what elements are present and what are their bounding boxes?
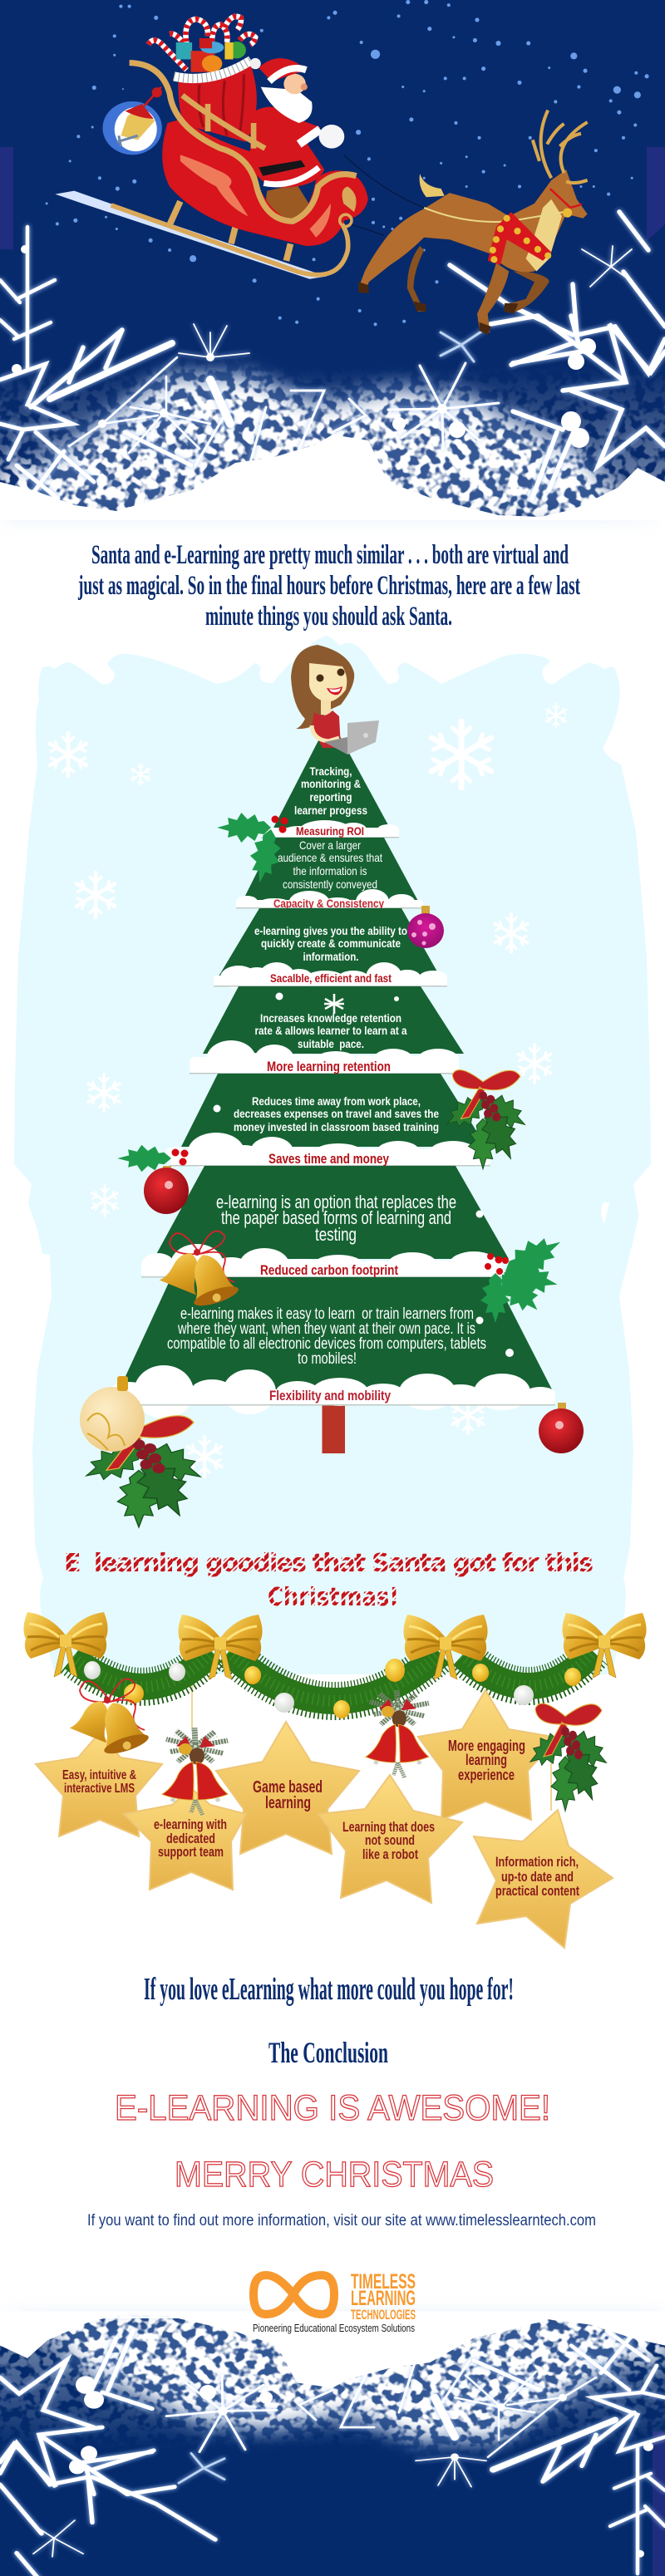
tier 6: carbon footprint: testing bbox=[315, 1224, 357, 1245]
intro text bbox=[77, 540, 580, 632]
tier 3: scalable: information. bbox=[303, 951, 359, 963]
tier 7: flexibility: e-learning makes it easy to learn or train learners from bbox=[180, 1305, 474, 1323]
tier 5: time and money bbox=[165, 1074, 490, 1171]
tree trunk bbox=[323, 1403, 345, 1453]
falling snow dots bbox=[46, 0, 649, 326]
star: more engaging: experience bbox=[458, 1767, 515, 1783]
logo wordmark: TECHNOLOGIES bbox=[351, 2307, 416, 2323]
slogan: e-learning is awesome: E-LEARNING IS AWESOME! bbox=[115, 2088, 550, 2128]
tier 7: flexibility: Flexibility and mobility bbox=[269, 1388, 391, 1404]
gift sack and toys bbox=[149, 17, 257, 142]
star: not like a robot: Learning that does bbox=[342, 1819, 435, 1835]
ornament: golden bells on star bbox=[70, 1679, 150, 1757]
footer crystals bbox=[0, 2311, 665, 2576]
star: information rich: Information rich, bbox=[495, 1854, 579, 1870]
tier 7: flexibility: where they want, when they want at their own pace. It is bbox=[177, 1320, 475, 1338]
tier 3: scalable: quickly create & communicate bbox=[261, 937, 401, 950]
star: not like a robot bbox=[318, 1775, 462, 1903]
snow crystals above white drift bbox=[0, 212, 665, 520]
ornament: large holly on tier 6 right bbox=[480, 1227, 569, 1323]
footer purple edge bbox=[653, 2431, 665, 2576]
star: not like a robot: like a robot bbox=[362, 1846, 418, 1862]
star: more engaging: More engaging bbox=[448, 1738, 525, 1754]
ornament: red bauble right bbox=[539, 1403, 584, 1453]
tier 1: tracking: reporting bbox=[309, 791, 352, 804]
ornament: gold bauble with holly bbox=[76, 1376, 211, 1527]
star: not like a robot: not sound bbox=[365, 1832, 415, 1848]
footer navy bbox=[0, 2318, 665, 2576]
red sleigh body bbox=[130, 63, 368, 246]
tier 2: capacity: Cover a larger bbox=[299, 838, 361, 852]
intro text: minute things you should ask Santa. bbox=[205, 602, 452, 632]
star: information rich: up-to date and bbox=[501, 1869, 574, 1885]
star: game based learning: Game based bbox=[253, 1778, 323, 1797]
tier 5: time and money: money invested in classroom based training bbox=[234, 1121, 439, 1133]
tier 7: flexibility: to mobiles! bbox=[298, 1350, 357, 1368]
star: dedicated support: dedicated bbox=[166, 1831, 215, 1846]
star: more engaging: learning bbox=[466, 1752, 507, 1768]
logo tagline: Pioneering Educational Ecosystem Solutions bbox=[253, 2322, 415, 2334]
sleigh with Santa bbox=[55, 17, 588, 335]
star: game based learning: learning bbox=[265, 1794, 311, 1812]
tier 4: retention bbox=[190, 986, 464, 1079]
star: interactive LMS: interactive LMS bbox=[64, 1782, 135, 1796]
tier 5: time and money: Saves time and money bbox=[268, 1151, 389, 1167]
ornament: hanging red bells left bbox=[162, 1728, 228, 1816]
garland baubles bbox=[84, 1659, 581, 1718]
ornament: holly and bow on tier 4-5 bbox=[441, 1070, 532, 1169]
hanging threads bbox=[192, 1682, 551, 1811]
tier 1: tracking: monitoring & bbox=[301, 778, 361, 790]
tier 4: retention: More learning retention bbox=[267, 1059, 391, 1074]
star: dedicated support bbox=[124, 1788, 246, 1890]
tier 5: time and money: decreases expenses on travel and saves the bbox=[234, 1108, 439, 1120]
website line: If you want to find out more information, visit our site at www.timelesslearntech.com bbox=[87, 2212, 596, 2229]
ornament: purple bauble bbox=[407, 906, 444, 948]
logo wordmark: TIMELESS bbox=[351, 2270, 416, 2293]
logo wordmark bbox=[351, 2270, 416, 2323]
tier 2: capacity: Capacity & Consistency bbox=[273, 897, 384, 910]
star: interactive LMS: Easy, intuitive & bbox=[62, 1768, 136, 1782]
slogan: merry christmas: MERRY CHRISTMAS bbox=[175, 2155, 494, 2195]
tier 1: tracking: Measuring ROI bbox=[296, 824, 364, 838]
ornament: red bauble left bbox=[144, 1166, 189, 1214]
Christmas tree bbox=[106, 718, 555, 1418]
infinity mark bbox=[254, 2275, 334, 2314]
tier 6: carbon footprint bbox=[141, 1166, 509, 1286]
tier 5: time and money: Reduces time away from work place, bbox=[252, 1095, 421, 1108]
conclusion heading: The Conclusion bbox=[268, 2036, 388, 2069]
sleigh runner bbox=[55, 191, 348, 279]
footer: snow band bbox=[0, 2311, 665, 2576]
tier 6: carbon footprint: Reduced carbon footprint bbox=[260, 1262, 398, 1278]
garland bbox=[72, 1652, 594, 1718]
tier 3: scalable bbox=[214, 908, 447, 992]
tier 2: capacity: audience & ensures that bbox=[278, 851, 382, 864]
logo bbox=[253, 2270, 416, 2334]
tier 3: scalable: Sacalble, efficient and fast bbox=[270, 971, 392, 985]
tier 6: carbon footprint: the paper based forms of learning and bbox=[221, 1207, 451, 1228]
tier 4: retention: Increases knowledge retention bbox=[260, 1012, 401, 1025]
header: night sky with Santa bbox=[0, 0, 665, 520]
star: information rich bbox=[474, 1810, 613, 1948]
reins bbox=[343, 155, 424, 235]
star: dedicated support: e-learning with bbox=[154, 1816, 227, 1832]
star: information rich: practical content bbox=[495, 1883, 579, 1899]
ornament: holly on tier 1 bbox=[217, 813, 288, 886]
tier 4: retention: suitable pace. bbox=[298, 1038, 364, 1050]
tier 3: scalable: e-learning gives you the ability to bbox=[254, 925, 407, 937]
character: girl with laptop on tree top bbox=[291, 645, 379, 755]
tier 4: retention: rate & allows learner to learn at a bbox=[254, 1025, 407, 1037]
tier 1: tracking: Tracking, bbox=[309, 765, 352, 778]
panel: white drips and background snowflakes bbox=[13, 704, 652, 1477]
tier 1: tracking bbox=[261, 718, 399, 838]
star: more engaging bbox=[418, 1690, 558, 1820]
heading: goodies bbox=[64, 1549, 594, 1612]
star: dedicated support: support team bbox=[158, 1844, 224, 1860]
ornament: hanging red bells right bbox=[366, 1690, 429, 1778]
tier 2: capacity bbox=[236, 838, 423, 914]
ornament: holly on tier 5 left bbox=[117, 1145, 188, 1172]
tier 7: flexibility bbox=[106, 1277, 555, 1418]
ornament: holly with bow at garland end bbox=[524, 1703, 613, 1811]
logo wordmark: LEARNING bbox=[351, 2287, 416, 2310]
reindeer bbox=[358, 111, 588, 335]
tier 1: tracking: learner progess bbox=[294, 804, 367, 817]
tier 2: capacity: consistently conveyed bbox=[283, 878, 377, 891]
star: interactive LMS bbox=[36, 1733, 162, 1836]
panel: light blue background bbox=[14, 636, 651, 1674]
heading: goodies: Christmas! bbox=[268, 1583, 399, 1612]
night sky bbox=[0, 0, 665, 517]
lantern bbox=[102, 87, 162, 155]
tier 2: capacity: the information is bbox=[293, 864, 367, 878]
tier 6: carbon footprint: e-learning is an option that replaces the bbox=[216, 1192, 456, 1212]
Santa figure bbox=[250, 58, 344, 221]
gold bows bbox=[23, 1612, 647, 1679]
ornament: golden bells on tier 6 bbox=[160, 1231, 240, 1310]
star: game based learning bbox=[216, 1722, 359, 1854]
side strips bbox=[0, 147, 665, 249]
heading: goodies: E learning goodies that Santa got for this bbox=[64, 1549, 594, 1578]
tier 7: flexibility: compatible to all electronic devices from computers, tablets bbox=[167, 1335, 486, 1353]
